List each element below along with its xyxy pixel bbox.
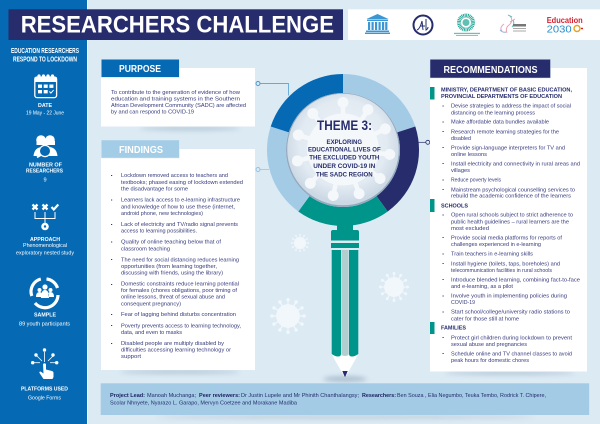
section: ministry: Provide sign-language interpreters for TV and: [451, 145, 565, 151]
section: schools: SCHOOLS: [441, 203, 468, 209]
date block: [26, 103, 64, 117]
title: RESEARCHERS CHALLENGE: [21, 12, 334, 39]
section: families: peak hours for domestic chores: [451, 358, 529, 364]
logo: Education 2030: 2030: [547, 24, 572, 36]
section: ministry: Install electricity and connectivity in rural areas and: [451, 161, 580, 167]
findings list: data, and even to masks: [121, 330, 182, 336]
findings list: Domestic constraints reduce learning potential: [121, 282, 239, 288]
icon: platforms: [31, 348, 58, 379]
section: schools: public health guidelines – rural learners are the: [451, 219, 569, 225]
findings list: Lack of electricity and TV/radio signal prevents: [121, 222, 238, 228]
logo: coloured figure: [500, 15, 526, 33]
section: schools: Introduce blended learning, combining fact-to-face: [451, 277, 580, 283]
section: ministry: Reduce poverty levels: [451, 178, 501, 184]
number of researchers block: NUMBER OF: [29, 162, 63, 168]
section: families: FAMILIES: [441, 326, 466, 332]
platforms block: PLATFORMS USED: [21, 386, 68, 392]
icon: sample: [31, 279, 58, 308]
icon: researchers: [34, 135, 58, 157]
magnifier: [267, 74, 419, 226]
credits text: Researchers:: [362, 393, 396, 399]
findings list: [111, 173, 243, 360]
sample block: [19, 312, 70, 327]
credits text: Ben Souza , Elia Negumbo, Teuka Tembo, Rodrick T. Chipere,: [397, 393, 546, 399]
findings list: The need for social distancing reduces learning: [121, 257, 239, 263]
sidebar: [0, 0, 88, 424]
section: schools: and e-learning, as a pilot: [451, 284, 513, 290]
section: schools: most excluded: [451, 226, 489, 232]
section: ministry: [441, 87, 580, 200]
theme text: THEME 3:: [317, 118, 372, 133]
section: ministry: villages: [451, 168, 470, 174]
findings list: consequent pregnancy): [121, 301, 181, 307]
purpose text: by and can respond to COVID-19: [111, 110, 194, 116]
sample block: SAMPLE: [34, 312, 56, 318]
date block: DATE: [38, 103, 52, 109]
heading: purpose: [101, 59, 179, 77]
purpose text: education and training systems in the Southern: [111, 96, 240, 102]
lens virus: [291, 97, 396, 202]
connector: recommendations: [418, 140, 430, 144]
section: schools: telecommunication facilities in rural schools: [451, 268, 552, 274]
heading: purpose: PURPOSE: [119, 64, 161, 75]
heading: findings: [101, 140, 179, 158]
section: schools: Open rural schools subject to strict adherence to: [451, 213, 573, 219]
findings list: Quality of online teaching below that of: [121, 240, 221, 246]
date block: 19 May - 22 June: [26, 111, 64, 117]
pencil tip: [332, 354, 358, 378]
section: schools: Start school/college/university radio stations to: [451, 310, 570, 316]
section: ministry: Research remote learning strategies for the: [451, 129, 559, 135]
section: families: sexual abuse and pregnancies: [451, 342, 527, 348]
findings list: discussing with friends, using the library): [121, 270, 223, 276]
platforms block: [21, 386, 68, 402]
theme text: UNDER COVID-19 IN: [313, 163, 376, 170]
section: schools: challenges experienced in e-learning: [451, 242, 541, 248]
findings list: android phone, new technologies): [121, 211, 203, 217]
section: schools: Install hygiene (toilets, taps, boreholes) and: [451, 261, 560, 267]
findings list: Disabled people are multiply disabled by: [121, 341, 224, 347]
findings list: and knowledge of how to use these (internet,: [121, 204, 235, 210]
section: ministry: disabled: [451, 136, 471, 142]
credits text: Manoah Muchanga;: [147, 393, 197, 399]
connector: findings: [256, 168, 269, 172]
logo: Education 2030: Education: [547, 16, 583, 25]
approach block: Phenomenological: [23, 243, 67, 249]
theme text: EXPLORING: [327, 139, 362, 146]
section: schools: [441, 203, 580, 322]
theme text: EDUCATIONAL LIVES OF: [308, 147, 381, 154]
section: ministry: distancing on the learning process: [451, 110, 535, 116]
section: schools: Involve youth in implementing policies during: [451, 294, 567, 300]
sidebar heading: [11, 48, 79, 64]
platforms block: Google Forms: [28, 396, 61, 402]
approach block: exploratory nested study: [16, 250, 74, 256]
approach block: [16, 237, 74, 256]
section: ministry: rebuild the academic confidence of the learners: [451, 194, 571, 200]
section: ministry: Make affordable data bundles available: [451, 120, 549, 126]
sidebar heading: RESPOND TO LOCKDOWN: [13, 56, 77, 64]
purpose text: To contribute to the generation of evidence of how: [111, 90, 241, 96]
findings list: access to learning possibilities.: [121, 229, 197, 235]
approach block: APPROACH: [30, 237, 60, 243]
number of researchers block: RESEARCHERS: [26, 169, 63, 175]
purpose text: African Development Community (SADC) are affected: [111, 103, 246, 109]
section: ministry: online lessons: [451, 152, 487, 158]
purpose text: [111, 90, 246, 116]
theme text: THE SADC REGION: [316, 171, 373, 178]
icon: approach: [32, 204, 58, 230]
decorative viruses: [270, 234, 409, 334]
credits strip: [101, 383, 589, 415]
section: ministry: MINISTRY, DEPARTMENT OF BASIC EDUCATION,: [441, 87, 572, 93]
credits text: Project Lead:: [110, 393, 145, 399]
heading: recommendations: [430, 59, 550, 78]
section: schools: Train teachers in e-learning skills: [451, 252, 533, 258]
findings list: classroom teaching: [121, 246, 170, 252]
findings list: difficulties accessing learning technology or: [121, 347, 231, 353]
pencil body: [332, 250, 341, 356]
findings list: for females (chores obligations, poor timing of: [121, 288, 237, 294]
findings list: Fear of lagging behind disturbs concentration: [121, 312, 236, 318]
findings list: Learners lack access to e-learning infrastructure: [121, 198, 240, 204]
findings list: opportunities (from learning together,: [121, 264, 217, 270]
logo: SADC seal: [414, 16, 432, 34]
number of researchers block: 9: [43, 177, 47, 183]
panel: recommendations: [430, 59, 587, 372]
number of researchers block: [26, 162, 63, 183]
heading: findings: FINDINGS: [119, 145, 163, 156]
section: schools: Provide social media platforms for reports of: [451, 235, 562, 241]
findings list: textbooks; phased easing of lockdown extended: [121, 180, 243, 186]
findings list: the disadvantage for some: [121, 187, 188, 193]
section: schools: COVID-19: [451, 300, 475, 306]
logo: teal sunburst: [454, 16, 480, 36]
sidebar heading: EDUCATION RESEARCHERS: [11, 48, 79, 55]
section: schools: cater for those still at home: [451, 316, 519, 322]
ring segments: [267, 74, 419, 226]
findings list: online lessons, threat of sexual abuse and: [121, 295, 225, 301]
icon: calendar: [35, 74, 57, 98]
heading: recommendations: RECOMMENDATIONS: [444, 65, 538, 76]
panel: findings: [101, 140, 255, 370]
collar: [331, 230, 359, 240]
section: ministry: Devise strategies to address the impact of social: [451, 104, 571, 110]
logo strip: [348, 9, 600, 40]
section: families: [441, 326, 572, 364]
findings list: Poverty prevents access to learning technology,: [121, 323, 241, 329]
theme text: THE EXCLUDED YOUTH: [309, 155, 380, 162]
lens: [286, 93, 400, 207]
credits text: Scolar Nhnyete, Nyarazo L. Garapo, Mervyn Coetzee and Morakane Madiba: [110, 401, 297, 407]
theme text: [308, 118, 381, 178]
credits text: [110, 393, 546, 407]
credits text: Dr Justin Lupele and Mr Phinith Chanthalangsy;: [241, 393, 360, 399]
section: ministry: PROVINCIAL DEPARTMENTS OF EDUCATION: [441, 94, 562, 100]
connector: purpose: [256, 82, 288, 96]
section: families: Protect girl children during lockdown to prevent: [451, 335, 572, 341]
section: families: Schedule online and TV channel classes to avoid: [451, 351, 572, 357]
panel shadows: [120, 126, 575, 418]
logo: UNESCO temple: [365, 14, 390, 34]
section: ministry: Mainstream psychological counselling services to: [451, 187, 575, 193]
pencil shadow: [323, 376, 367, 382]
findings list: support: [121, 354, 141, 360]
sample block: 89 youth participants: [19, 321, 70, 327]
panel: purpose: [101, 59, 255, 126]
pencil handle: [323, 224, 367, 382]
findings list: Lockdown removed access to teachers and: [121, 173, 228, 179]
logo: Education 2030: [547, 16, 583, 36]
credits text: Peer reviewers:: [199, 393, 240, 399]
section markers: [430, 87, 434, 334]
